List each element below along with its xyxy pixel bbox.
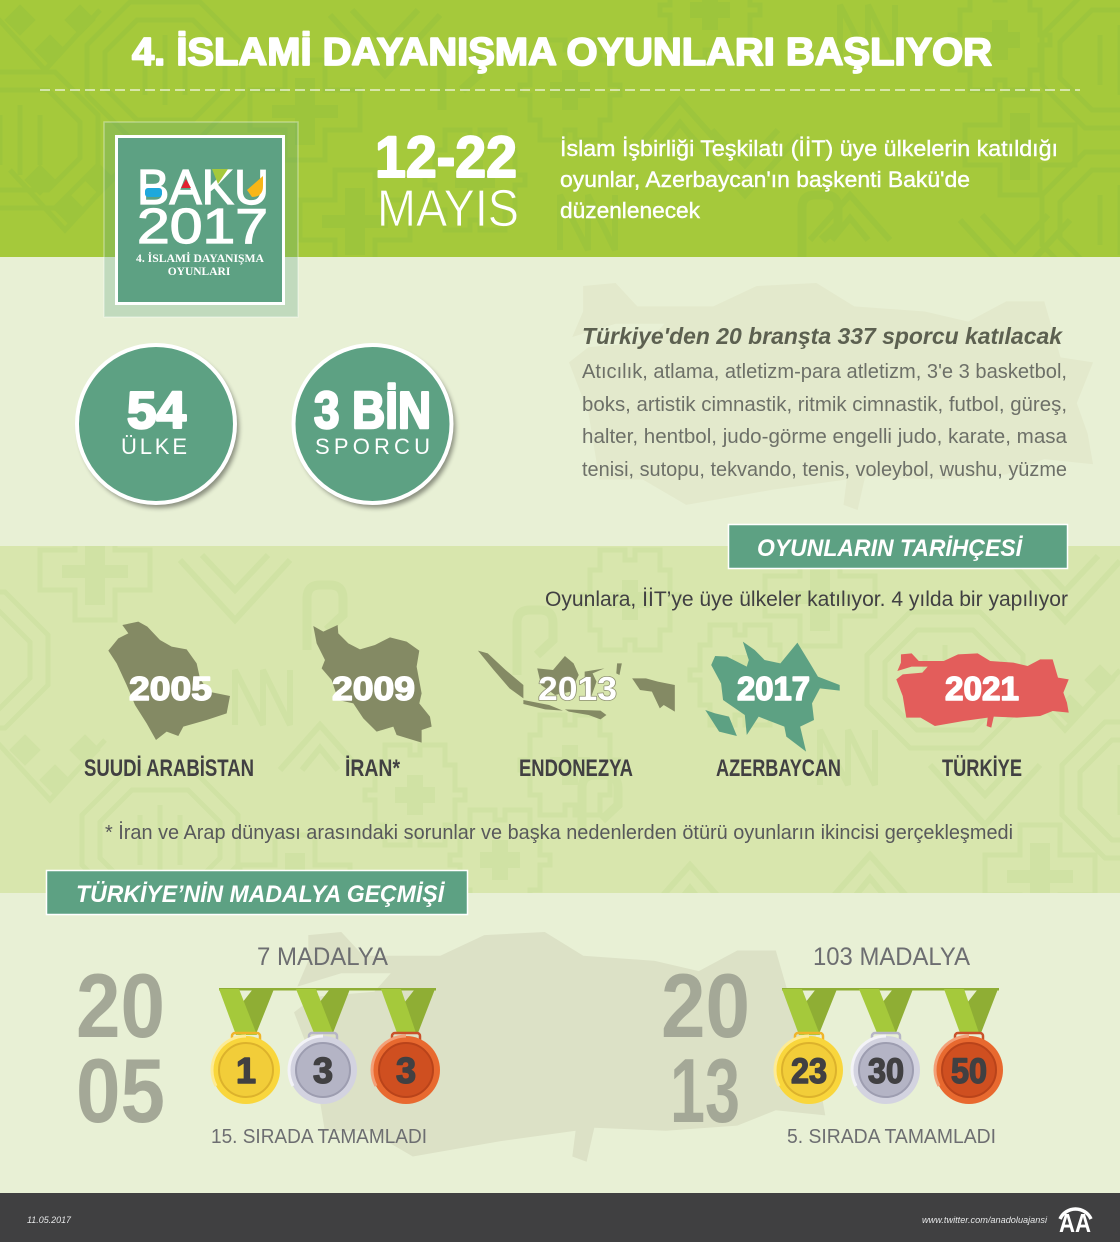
year: 2013: 13 [670,1041,740,1142]
date: MAYIS: MAYIS [377,180,519,238]
host: Endonezya 2013: 2013 [538,670,617,707]
silver medal: 3 [313,1050,333,1091]
banner: madalya geçmişi [46,870,468,914]
sports list: Atıcılık, atlama, atletizm-para atletizm, 3'e 3 basketbol, [582,360,1067,383]
year: 2013: 20 [661,956,750,1057]
date: 12-22: 12-22 [375,125,517,190]
logo subtitle: 4. İSLAMİ DAYANIŞMA [136,251,265,265]
logo wordmark: 2017: 2017 [137,200,268,254]
stat circle: 54 ülke: 54 [127,382,186,440]
sports list: tenisi, sutopu, tekvando, tenis, voleybol, wushu, yüzme [582,458,1067,481]
stat circle: 3 bin sporcu [294,345,456,508]
gold medal [212,1033,280,1104]
map: Türkiye ghost behind medals [294,932,825,1162]
stat circle: 54 ülke [77,345,239,508]
bronze medal: 3 [396,1050,416,1091]
host: Azerbaycan 2017: AZERBAYCAN [716,755,841,782]
stat circle: 3 bin sporcu: SPORCU [315,434,430,459]
logo subtitle line 2: OYUNLARI [168,266,231,278]
background: history band [0,546,1120,893]
stat circle: 54 ülke: ÜLKE [121,434,187,459]
label: 103 madalya: 103 MADALYA [813,943,970,971]
year: 2005 [76,956,165,1142]
year: 2005: 20 [76,956,165,1057]
gold medal: 1 [236,1050,256,1091]
footer bar [0,1193,1120,1242]
label: 7 madalya: 7 MADALYA [257,943,388,971]
silver medal [852,1033,920,1104]
bronze medal: 50 [951,1052,987,1091]
host: Endonezya 2013: ENDONEZYA [519,755,633,782]
host: Türkiye 2021: TÜRKİYE [942,755,1022,782]
intro text: düzenlenecek [560,198,701,223]
result: 2005: 15. SIRADA TAMAMLADI [211,1126,427,1148]
host: Suudi Arabistan 2005: SUUDİ ARABİSTAN [84,755,254,782]
sports list: halter, hentbol, judo-görme engelli judo, karate, masa [582,425,1068,448]
footer twitter: www.twitter.com/anadoluajansi [922,1215,1048,1225]
sports heading: Türkiye'den 20 branşta 337 sporcu katılacak [582,323,1063,349]
logo wordmark: BAKU: BAKU [137,161,269,215]
banner: oyunların tarihçesi: OYUNLARIN TARİHÇESİ [757,535,1023,562]
result: 2013: 5. SIRADA TAMAMLADI [787,1126,996,1148]
ribbons [782,989,998,1035]
host: Türkiye 2021 [896,653,1069,782]
host: İran 2009: İRAN* [345,755,401,782]
gold medal [775,1033,843,1104]
stat circle: 3 bin sporcu: 3 BİN [314,382,431,440]
medal set: 2013 [775,988,1003,1104]
intro text [560,136,1058,223]
gold medal: 23 [791,1052,827,1091]
silver medal: 30 [868,1052,904,1091]
footnote: * İran ve Arap dünyası arasındaki sorunlar ve başka nedenlerden ötürü oyunların ikincisi gerçekleşmedi [105,821,1013,844]
host: Suudi Arabistan 2005 [84,622,254,782]
logo colour accents [145,169,263,197]
year: 2005: 05 [76,1041,165,1142]
host: Endonezya 2013 [478,651,675,782]
host: Suudi Arabistan 2005: 2005 [129,670,212,707]
bronze medal [935,1033,1003,1104]
background: pale section [0,257,1120,546]
icon: AA logo: AA [1059,1208,1091,1238]
background: medal section [0,893,1120,1193]
intro text: İslam İşbirliği Teşkilatı (İİT) üye ülkelerin katıldığı [560,136,1058,161]
map: Türkiye ghost behind sports text [569,283,1093,510]
sports list [582,360,1068,481]
footer date: 11.05.2017 [27,1215,72,1225]
host: İran 2009: 2009 [332,670,415,707]
host: İran 2009 [313,625,432,782]
ribbons [219,989,435,1035]
host: Azerbaycan 2017 [705,642,841,782]
title: 4. İSLAMİ DAYANIŞMA OYUNLARI BAŞLIYOR [132,31,992,74]
sports list: boks, artistik cimnastik, ritmik cimnastik, futbol, güreş, [582,393,1067,416]
banner: madalya geçmişi: TÜRKİYE’NİN MADALYA GEÇMİŞİ [76,881,445,908]
silver medal [289,1033,357,1104]
host: Türkiye 2021: 2021 [945,670,1019,707]
intro text: oyunlar, Azerbaycan'ın başkenti Bakü'de [560,167,970,192]
bronze medal [372,1033,440,1104]
logo panel: Baku 2017 [104,122,298,317]
year: 2013 [661,956,750,1142]
host: Azerbaycan 2017: 2017 [737,670,810,707]
medal set: 2005 [212,988,440,1104]
banner: oyunların tarihçesi [728,524,1068,568]
background: green header band [0,0,1120,257]
history intro: Oyunlara, İİT’ye üye ülkeler katılıyor. 4 yılda bir yapılıyor [545,588,1068,611]
